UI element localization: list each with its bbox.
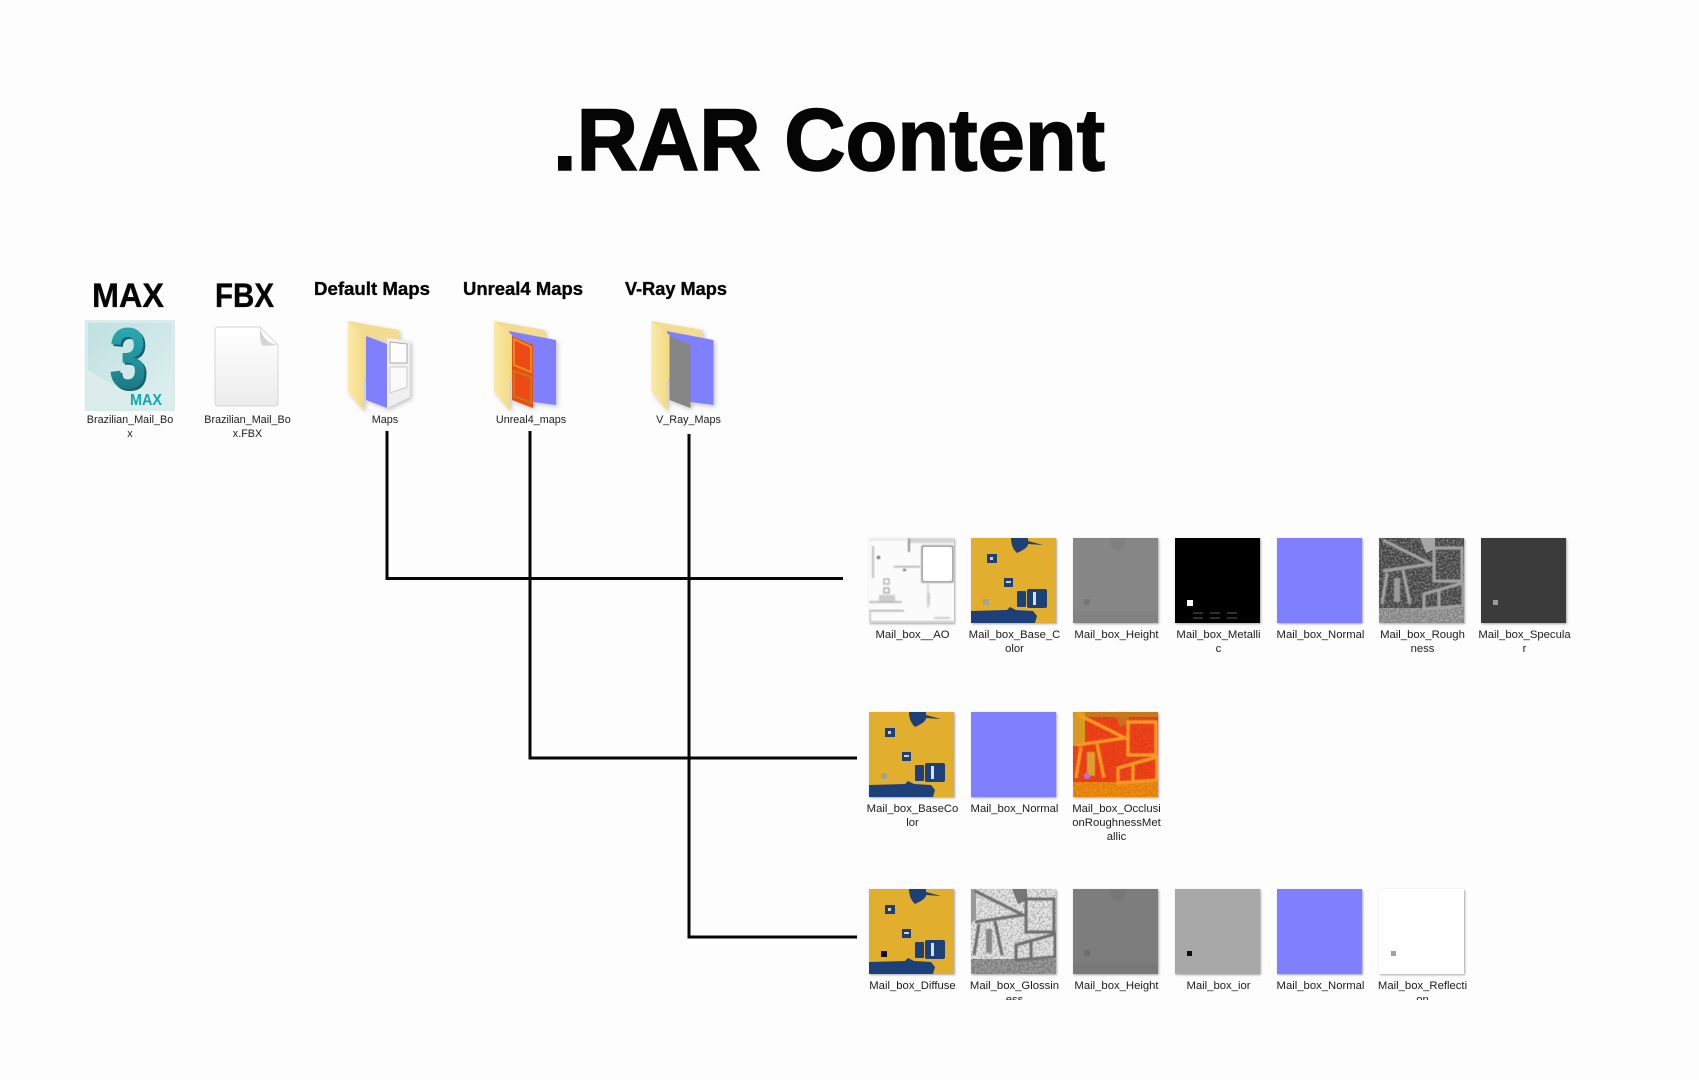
thumbnail: Height <box>1073 538 1159 641</box>
heading: MAX: MAX <box>92 277 164 315</box>
file name: x <box>127 428 133 440</box>
folder name: Unreal4_maps <box>496 414 567 426</box>
icon: blank document <box>215 327 278 406</box>
thumbnail: Metallic: c <box>1216 643 1222 655</box>
thumbnail: Specular: r <box>1523 643 1527 655</box>
folder: V_Ray_Maps <box>652 321 722 426</box>
thumbnail: Height: Mail_box_Height <box>1074 629 1159 641</box>
thumbnail: Normal: Mail_box_Normal <box>971 803 1058 815</box>
thumbnail: Specular <box>1478 538 1571 655</box>
thumbnail: Specular: Mail_box_Specula <box>1478 629 1571 641</box>
thumbnail: Normal <box>1277 538 1364 641</box>
thumbnail: OcclusionRoughnessMetallic <box>1072 712 1162 843</box>
icon: 3ds Max: 3 <box>111 313 149 409</box>
clipped label line: on <box>1416 994 1429 1006</box>
thumbnail: Base Color: olor <box>1005 643 1024 655</box>
thumbnail: Metallic: Mail_box_Metalli <box>1176 629 1261 641</box>
folder name: V_Ray_Maps <box>656 414 722 426</box>
thumbnail: Normal <box>971 712 1058 815</box>
thumbnail: Glossiness: Mail_box_Glossin <box>970 980 1059 992</box>
row: Unreal4 maps <box>867 712 1162 843</box>
icon: folder with ORM and normal sheets <box>494 321 556 411</box>
thumbnail: Base Color <box>969 538 1060 655</box>
thumbnail: OcclusionRoughnessMetallic: Mail_box_Occlusi <box>1072 803 1161 815</box>
file: MAX scene <box>84 311 175 440</box>
thumbnail: Roughness: Mail_box_Rough <box>1380 629 1465 641</box>
thumbnail: OcclusionRoughnessMetallic: allic <box>1107 831 1127 843</box>
row: V-Ray maps <box>869 889 1467 1006</box>
thumbnail: Diffuse: Mail_box_Diffuse <box>869 980 956 992</box>
thumbnail: AO: Mail_box__AO <box>875 629 950 641</box>
file name: Brazilian_Mail_Bo <box>87 414 173 426</box>
thumbnail: BaseColor: Mail_box_BaseCo <box>867 803 958 815</box>
icon: folder with height and normal sheets <box>652 321 714 411</box>
thumbnail: OcclusionRoughnessMetallic: onRoughnessMet <box>1072 817 1162 829</box>
thumbnail: Diffuse <box>869 889 956 992</box>
clipped label line: ess <box>1006 994 1024 1006</box>
icon: 3ds Max: 3 <box>109 311 147 407</box>
heading: FBX: FBX <box>215 277 274 315</box>
thumbnail: Reflection: Mail_box_Reflecti <box>1378 980 1467 992</box>
thumbnail: Normal <box>1277 889 1364 992</box>
file name: Brazilian_Mail_Bo <box>204 414 291 426</box>
thumbnail: AO <box>869 538 954 641</box>
thumbnail: Roughness: ness <box>1411 643 1435 655</box>
thumbnail: Metallic <box>1175 538 1261 655</box>
folder: Maps <box>348 321 410 426</box>
thumbnail: Glossiness <box>970 889 1059 1006</box>
file: FBX <box>204 327 291 440</box>
thumbnail: ior <box>1175 889 1260 992</box>
heading: V-Ray Maps: V-Ray Maps <box>625 279 727 299</box>
folder: Unreal4_maps <box>494 321 567 426</box>
title: .RAR Content <box>553 90 1105 189</box>
row: default maps <box>869 538 1571 655</box>
icon: 3ds Max: MAX <box>130 392 162 409</box>
icon: folder with normal and AO sheets <box>348 321 410 411</box>
connector: Maps to first row <box>387 431 843 578</box>
thumbnail: Normal: Mail_box_Normal <box>1277 980 1364 992</box>
heading: Unreal4 Maps: Unreal4 Maps <box>463 279 583 299</box>
thumbnail: BaseColor: lor <box>906 817 919 829</box>
heading: Default Maps: Default Maps <box>314 279 430 299</box>
thumbnail: BaseColor <box>867 712 958 829</box>
folder name: Maps <box>372 414 399 426</box>
thumbnail: Base Color: Mail_box_Base_C <box>969 629 1060 641</box>
thumbnail: Height <box>1073 889 1159 992</box>
connector: V_Ray_Maps to third row <box>689 434 857 937</box>
thumbnail: Reflection <box>1378 889 1467 1006</box>
file name: x.FBX <box>233 428 262 440</box>
thumbnail: Normal: Mail_box_Normal <box>1277 629 1364 641</box>
thumbnail: ior: Mail_box_ior <box>1186 980 1251 992</box>
connector: Unreal4_maps to second row <box>530 431 857 758</box>
thumbnail: Height: Mail_box_Height <box>1074 980 1159 992</box>
thumbnail: Roughness <box>1379 538 1465 655</box>
icon: 3ds Max <box>84 311 175 411</box>
